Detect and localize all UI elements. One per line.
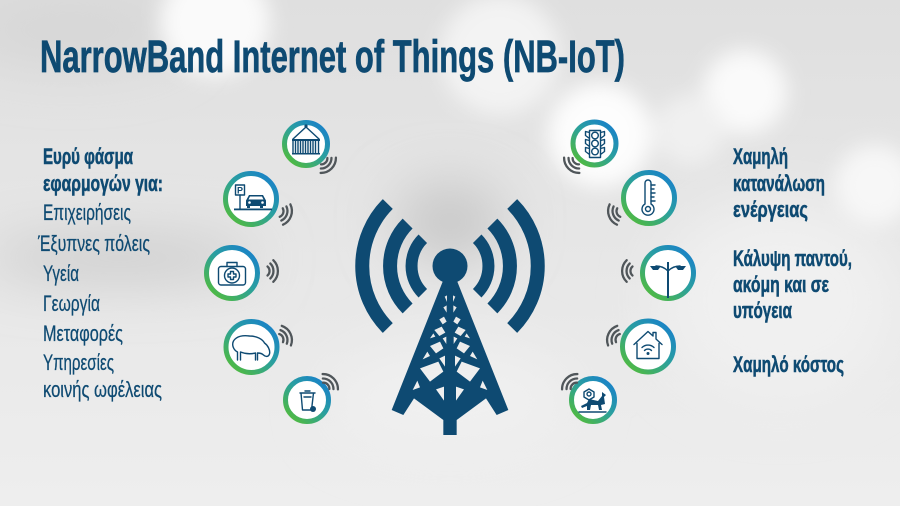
- icon: signal waves thermometer: [605, 202, 622, 226]
- text block: benefits: Χαμηλό κόστος: [733, 352, 844, 377]
- text block: applications list: Έξυπνες πόλεις: [37, 231, 150, 256]
- text block: benefits: υπόγεια: [733, 298, 792, 323]
- text block: applications list: κοινής ωφέλειας: [43, 377, 162, 402]
- text block: benefits: Χαμηλή: [733, 144, 788, 169]
- icon: signal waves parking: [278, 202, 295, 226]
- icon: signal waves pet: [559, 371, 581, 393]
- text block: applications list: Υπηρεσίες: [43, 350, 114, 375]
- text block: applications list: Γεωργία: [43, 291, 100, 316]
- antenna tower with signal arcs: [362, 204, 538, 435]
- icon: medical kit: [206, 248, 258, 298]
- icon: traffic light: [573, 122, 616, 165]
- icon: signal waves traffic light: [561, 154, 583, 176]
- tower head: [432, 248, 468, 284]
- icon: signal waves bin: [319, 371, 341, 393]
- icon: signal waves smart home: [604, 324, 622, 348]
- text block: benefits: ακόμη και σε: [733, 272, 829, 297]
- text block: applications list: Υγεία: [43, 261, 79, 286]
- icon: waste bin: [286, 378, 328, 422]
- icon: smart parking: [226, 174, 276, 224]
- icon: pet tracking: [572, 378, 614, 422]
- icon: street lamp: [642, 248, 694, 298]
- text block: applications list: Επιχειρήσεις: [43, 200, 131, 225]
- text block: applications list: Μεταφορές: [43, 321, 123, 346]
- title: NarrowBand Internet of Things (NB-IoT): [40, 31, 625, 82]
- icon: smart home: [622, 321, 674, 372]
- icon: signal waves medical: [268, 260, 278, 282]
- icon: signal waves container: [317, 154, 339, 176]
- tower lattice: [392, 280, 508, 435]
- text block: benefits: κατανάλωση: [733, 171, 825, 196]
- text block: applications list: Ευρύ φάσμα: [43, 144, 133, 169]
- icon: container: [284, 122, 328, 166]
- text block: benefits: ενέργειας: [733, 197, 808, 222]
- icon: sheep: [226, 322, 277, 372]
- text block: applications list: εφαρμογών για:: [43, 171, 163, 196]
- text block: benefits: [733, 144, 852, 377]
- icon: thermometer: [624, 172, 674, 224]
- icon: smart parking: P: [237, 186, 243, 196]
- text block: applications list: [37, 144, 163, 402]
- signal arcs: [362, 204, 538, 328]
- icon: signal waves street lamp: [622, 260, 632, 282]
- icon: signal waves sheep: [277, 324, 295, 348]
